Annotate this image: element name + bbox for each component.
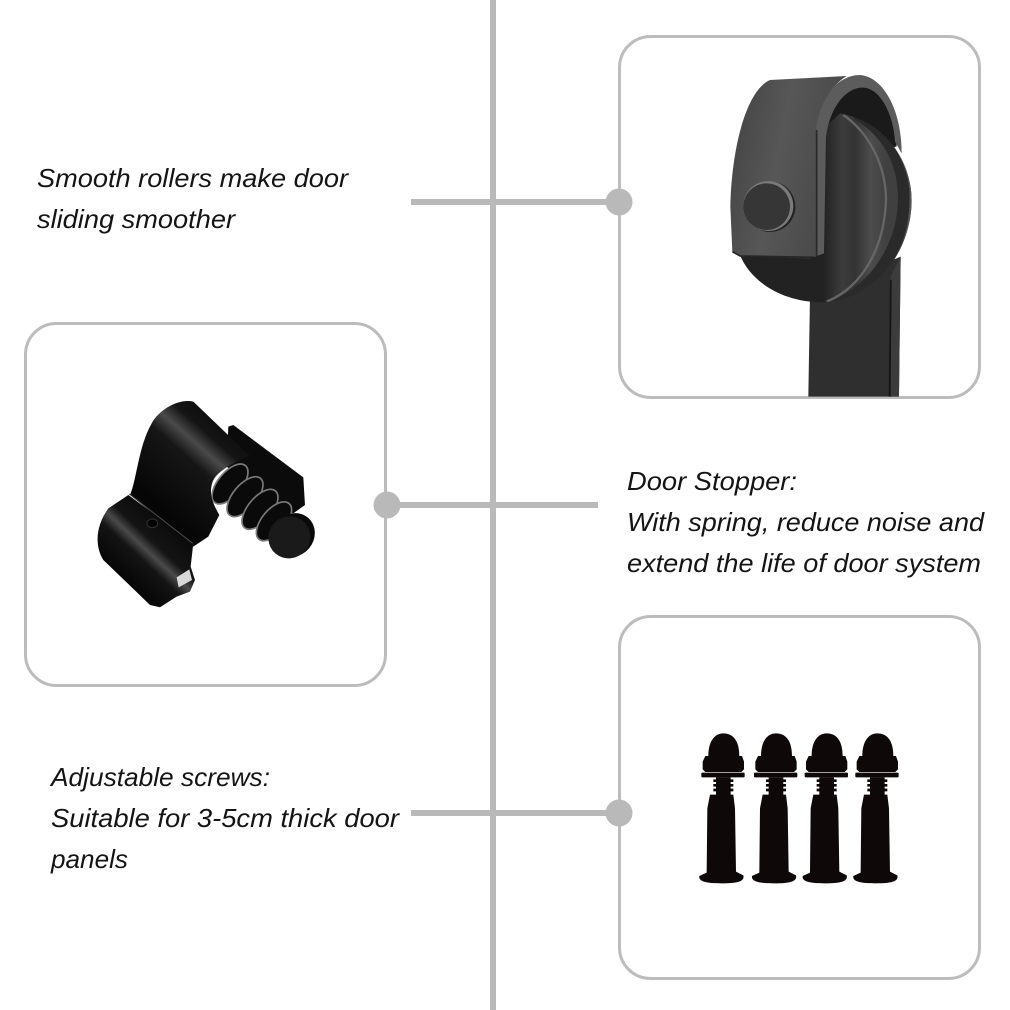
bracket opening <box>823 87 897 150</box>
block slot <box>177 569 192 587</box>
screw 1 <box>699 733 745 883</box>
bolt <box>745 181 795 232</box>
text: door stopper: extend the life of door system <box>627 548 981 578</box>
icon: door stopper <box>98 401 324 607</box>
wheel <box>740 113 912 302</box>
text: adjustable screws: Suitable for 3-5cm thick door <box>51 803 400 833</box>
connector: screws line <box>411 800 632 826</box>
connector: roller line <box>411 188 632 216</box>
wheel grooves <box>827 113 911 307</box>
text: adjustable screws <box>49 762 400 874</box>
strap <box>808 257 901 397</box>
panel: screws photo <box>620 616 980 978</box>
central vertical divider <box>490 0 496 1010</box>
connector: door stopper line <box>374 492 598 518</box>
text: door stopper <box>627 466 986 578</box>
icon: four screws <box>699 733 899 883</box>
text: smooth rollers: Smooth rollers make door <box>37 163 349 193</box>
back plate <box>227 425 305 513</box>
screw 4 <box>853 733 899 883</box>
text: door stopper: With spring, reduce noise and <box>627 507 986 537</box>
bracket rim <box>815 75 902 257</box>
text: adjustable screws: Adjustable screws: <box>49 762 270 792</box>
spring coils <box>205 458 298 547</box>
screw 3 <box>803 733 848 883</box>
panel: door stopper photo <box>26 324 386 686</box>
text: adjustable screws: panels <box>50 844 128 874</box>
panel: roller photo <box>620 36 980 398</box>
screw hole <box>147 519 158 528</box>
plunger button <box>263 504 324 566</box>
screw 2 <box>752 733 797 883</box>
main body <box>130 401 250 547</box>
icon: roller and strap <box>730 75 912 397</box>
bracket plate <box>730 76 847 258</box>
text: smooth rollers <box>37 163 349 234</box>
lower block <box>98 495 195 607</box>
text: door stopper: Door Stopper: <box>627 466 797 496</box>
text: smooth rollers: sliding smoother <box>37 204 236 234</box>
